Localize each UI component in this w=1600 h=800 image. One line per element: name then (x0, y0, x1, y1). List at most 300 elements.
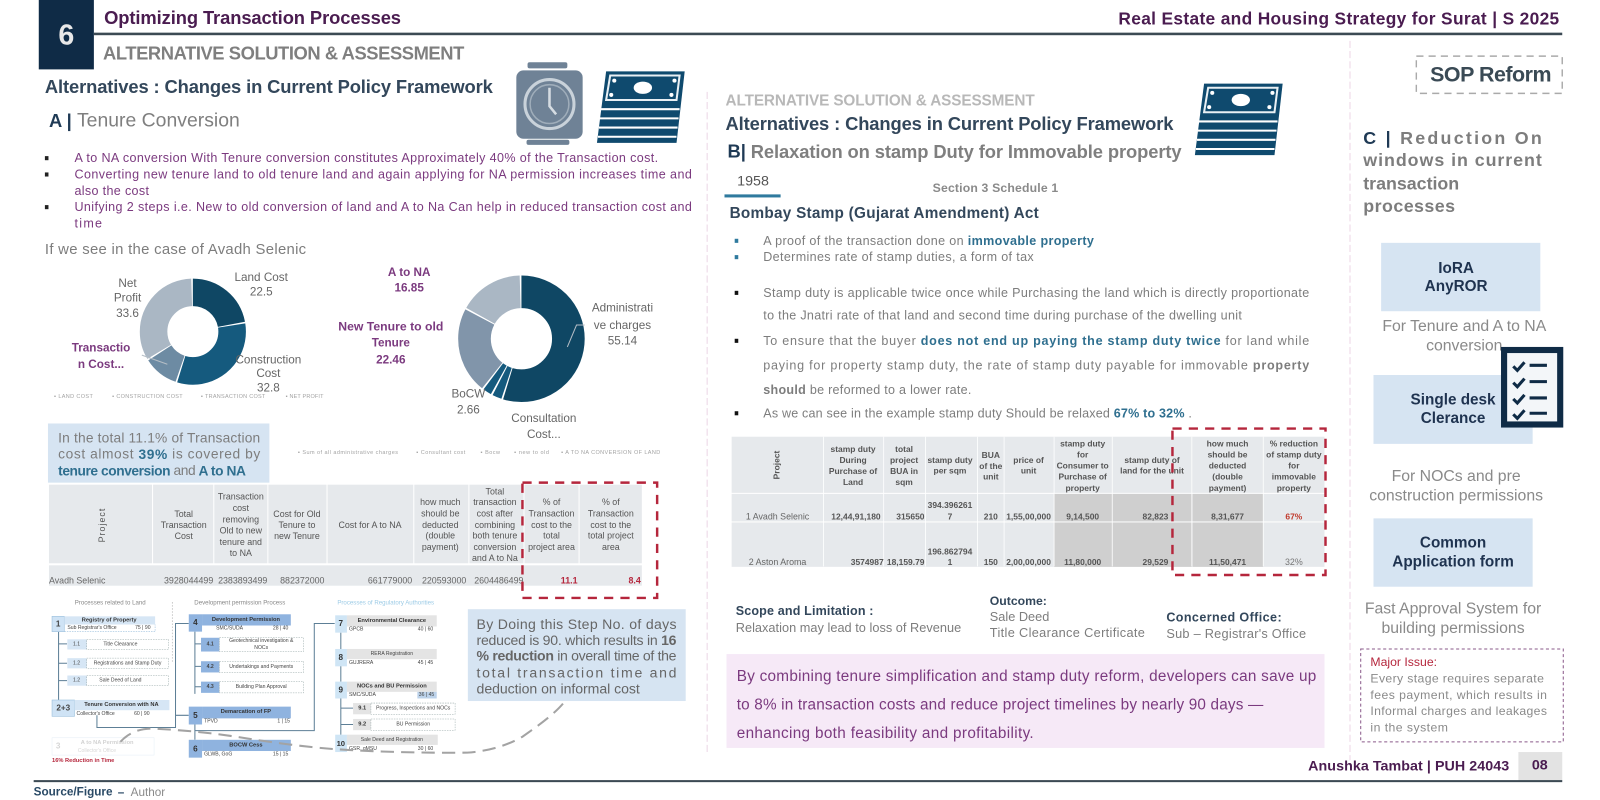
table: transaction cost comparison: Project (97, 508, 107, 542)
step 4.2: Undertakings and Payments (229, 664, 294, 670)
bullets: act purpose (735, 234, 1094, 264)
table: transaction cost comparison: combining (475, 520, 515, 530)
card: iORA: IoRA (1438, 260, 1474, 277)
table: stamp duty comparison: 2,00,00,000 (1006, 557, 1051, 567)
panel C heading: transaction (1363, 174, 1459, 194)
table: transaction cost comparison: tenure and (220, 537, 262, 547)
time reduction note: 16% Reduction in Time (52, 758, 114, 764)
table: transaction cost comparison: 3928044499 (164, 576, 213, 586)
process diagram: Development permission Process (194, 600, 285, 607)
caption: fast approval: Fast Approval System for (1365, 601, 1541, 618)
step 9.1: Progress, Inspections and NOCs (376, 706, 451, 712)
table: transaction cost comparison: 2604486499 (474, 576, 524, 586)
step 4.1: Geotechnical investigation & (229, 638, 294, 644)
donut 1 labels: n Cost... (78, 358, 124, 371)
donut 1 labels: Transactio (72, 341, 130, 354)
table: stamp duty comparison: property (1066, 483, 1100, 493)
card: single desk (1373, 375, 1533, 444)
donut chart: project cost split (154, 292, 232, 371)
table: stamp duty comparison: 1 Avadh Selenic (746, 511, 810, 521)
table: stamp duty comparison: BUA in (890, 466, 918, 476)
donut 1 legend: ▪ TRANSACTION COST (201, 394, 266, 400)
callout: days reduced: deduction on informal cost (477, 680, 640, 696)
bullets: stamp duty argument (735, 286, 1309, 420)
caption: fast approval: building permissions (1381, 620, 1525, 637)
conclusion box: By combining tenure simplification and stamp duty reform, developers can save up (737, 668, 1316, 685)
table: stamp duty comparison: deducted (1209, 461, 1246, 471)
card: common application form: Common (1420, 534, 1486, 551)
table: transaction cost comparison: 2383893499 (218, 576, 267, 586)
panel C heading: processes (1363, 196, 1455, 216)
table: transaction cost comparison: Cost (175, 531, 193, 541)
step 6 (189, 740, 291, 758)
step 9 (335, 682, 437, 698)
concerned office (1166, 610, 1306, 641)
step 1.1: 1.1 (73, 641, 80, 647)
donut 1 legend: ▪ NET PROFIT (286, 394, 324, 400)
bullets: tenure conversion: time (74, 216, 102, 230)
table: transaction cost comparison: Transaction (588, 508, 634, 518)
caption: fast approval (1365, 601, 1541, 637)
table: stamp duty comparison: 8,31,677 (1211, 511, 1244, 521)
panel divider A/B (706, 92, 708, 753)
icon: clock (516, 62, 583, 145)
table: transaction cost comparison: and A to Na (472, 553, 518, 563)
table: stamp duty comparison: of the (979, 461, 1003, 471)
step 4: 28 | 40 (273, 626, 289, 632)
table: stamp duty comparison: Consumer to (1057, 461, 1109, 471)
card: single desk: Clerance (1421, 410, 1485, 427)
step 2+3: 2+3 (56, 704, 71, 713)
table: transaction cost comparison: cost (233, 503, 249, 513)
table: transaction cost comparison: 220593000 (422, 576, 466, 586)
donut 1 labels: 33.6 (116, 307, 139, 320)
caption: tenure conversion: For Tenure and A to NA (1382, 318, 1547, 335)
bullets: stamp duty argument: Stamp duty is applicable twice once while Purchasing the land which is directly proportionate (763, 286, 1309, 300)
caption: NOCs (1369, 468, 1543, 504)
table: transaction cost comparison: payment) (422, 542, 459, 552)
bullets: tenure conversion: Unifying 2 steps i.e. New to old conversion of land and A to Na Can help in reduced transaction cost and (74, 200, 692, 214)
donut 2 labels: BoCW (451, 387, 486, 400)
donut 1 legend (54, 394, 324, 400)
process diagram: Processes of Regulatory Authorities (337, 600, 434, 607)
removed step 3 (52, 738, 154, 755)
major issue note: Informal charges and leakages (1370, 704, 1547, 718)
act name: Bombay Stamp (Gujarat Amendment) Act (730, 205, 1039, 222)
act year: 1958 (737, 174, 769, 190)
step 9: 36 | 45 (419, 692, 434, 698)
step 1.1 (67, 639, 168, 649)
step 1: Sub Registrar's Office (67, 625, 117, 631)
step 1.3: Sale Deed of Land (99, 678, 142, 684)
card: iORA: AnyROR (1425, 278, 1488, 295)
table: stamp duty comparison: of stamp duty (1266, 450, 1322, 460)
highlight box: table 2 (1172, 429, 1326, 575)
donut 1 labels: Profit (114, 291, 142, 304)
connector lines (59, 623, 353, 740)
bullets: tenure conversion: A to NA conversion With Tenure conversion constitutes Approximately 40% of the Transaction cost. (74, 151, 658, 165)
section reference: Section 3 Schedule 1 (933, 181, 1058, 195)
panel C heading: C | Reduction On (1363, 128, 1542, 148)
card: common application form: Application form (1392, 554, 1514, 571)
step 1: Registry of Property (82, 617, 137, 623)
table: transaction cost comparison: total (543, 531, 560, 541)
card: single desk: Single desk (1411, 392, 1496, 409)
step 1.2: Registrations and Stamp Duty (94, 660, 162, 666)
step 7: Environmental Clearance (358, 618, 426, 624)
step 4: SMC/SUDA (216, 626, 244, 632)
table: stamp duty comparison: Purchase of (1058, 472, 1107, 482)
callout: days reduced: % reduction in overall time of the (477, 648, 677, 664)
step 4.2 (201, 661, 304, 672)
table: stamp duty comparison: 18,159.79 (887, 557, 925, 567)
table: stamp duty comparison: 32% (1285, 557, 1303, 567)
table: transaction cost comparison: removing (223, 514, 259, 524)
bullets: stamp duty argument: As we can see in the example stamp duty Should be relaxed 67% to 32% . (763, 406, 1192, 420)
table: transaction cost comparison: cost to the (590, 520, 631, 530)
step 7: 40 | 60 (418, 627, 433, 633)
table: stamp duty comparison: 150 (984, 557, 998, 567)
removed step 3: Collector's Office (78, 748, 116, 754)
card: iORA (1381, 243, 1540, 311)
table: stamp duty comparison: sqm (895, 477, 913, 487)
table: transaction cost comparison: Total (174, 509, 193, 519)
act year (724, 174, 781, 197)
outcome: Title Clearance Certificate (990, 625, 1145, 640)
source note: Source/Figure – Author (34, 785, 165, 798)
table: transaction cost comparison: deducted (422, 520, 459, 530)
table: stamp duty comparison: 315650 (896, 511, 925, 521)
major issue note: in the system (1370, 721, 1448, 735)
scope and limitation: Scope and Limitation : (736, 604, 873, 618)
outcome (990, 594, 1145, 640)
step 2+3 (52, 700, 169, 717)
donut 2 legend: ▪ new to old (514, 450, 549, 456)
author credit: Anushka Tambat | PUH 24043 (1308, 758, 1509, 774)
table: transaction cost comparison: 882372000 (280, 576, 325, 586)
table: transaction cost comparison: cost to the (531, 520, 572, 530)
table: stamp duty comparison (732, 437, 1324, 567)
caption: tenure conversion: conversion (1426, 337, 1502, 354)
scope and limitation: Relaxation may lead to loss of Revenue (736, 620, 961, 635)
panel B heading: Alternatives : Changes in Current Policy Framework (726, 113, 1174, 134)
donut 1 labels (72, 271, 301, 394)
table: stamp duty comparison: 1,55,00,000 (1006, 511, 1051, 521)
icon: checklist (1504, 350, 1560, 424)
panel heading: alternatives: Alternatives : Changes in Current Policy Framework (45, 76, 494, 97)
table: transaction cost comparison: Old to new (220, 526, 263, 536)
step 9: 9 (339, 685, 344, 694)
donut 2 legend: ▪ Sum of all administrative charges (298, 450, 398, 456)
step 2+3: Tenure Conversion with NA (84, 702, 159, 708)
step 4.3 (201, 682, 304, 693)
donut 1 labels: Cost (256, 367, 281, 380)
card: common application form (1373, 518, 1533, 587)
donut 2 labels: 16.85 (395, 281, 424, 294)
step 2+3: Collector's Office (77, 711, 115, 717)
table: stamp duty comparison: total (895, 444, 913, 454)
step 1 (52, 616, 155, 632)
donut 2 labels: Consultation (511, 412, 576, 425)
table: transaction cost comparison: Cost for A to NA (338, 520, 402, 530)
step 5: TPVD (204, 718, 218, 724)
bullets: tenure conversion: also the cost (74, 184, 149, 198)
step 9.1: 9.1 (358, 706, 367, 712)
table: stamp duty comparison: per sqm (934, 466, 966, 476)
step 4.2: 4.2 (207, 664, 214, 670)
table: stamp duty comparison: price of (1013, 455, 1044, 465)
table: stamp duty comparison: 210 (984, 511, 998, 521)
donut 1 labels: 22.5 (250, 285, 273, 298)
table: transaction cost comparison: Transaction (161, 520, 207, 530)
step 1.1: Title Clearance (103, 641, 138, 647)
table: transaction cost comparison: 11.1 (561, 576, 578, 586)
step 6: 6 (193, 744, 198, 753)
table: stamp duty comparison: 7 (948, 511, 953, 521)
removed step 3: A to NA Permission (81, 740, 134, 746)
table: transaction cost comparison: % of (543, 497, 561, 507)
table: stamp duty comparison: Project (772, 450, 782, 479)
table: stamp duty comparison: stamp duty (831, 444, 876, 454)
step 9.1 (353, 703, 455, 714)
table: stamp duty comparison: project (890, 455, 918, 465)
table: stamp duty comparison: unit (983, 472, 999, 482)
table: stamp duty comparison: 11,80,000 (1064, 557, 1102, 567)
bullets: act purpose: A proof of the transaction done on immovable property (763, 234, 1094, 248)
donut 2 labels: Cost... (527, 428, 561, 441)
step 4.3: 4.3 (207, 684, 214, 690)
step 5: 5 (193, 711, 198, 720)
callout: tenure share of transaction cost: cost almost 39% is covered by (58, 447, 260, 462)
donut 2 labels: A to NA (388, 266, 431, 279)
SOP reform tag (1416, 56, 1562, 93)
panel divider B/C (1349, 41, 1351, 760)
icon: money stack (597, 71, 685, 143)
concerned office: Sub – Registrar's Office (1166, 626, 1306, 641)
table: transaction cost comparison: new Tenure (274, 531, 320, 541)
table: stamp duty comparison: 1 (948, 557, 953, 567)
donut 2 labels: ve charges (594, 319, 651, 332)
step 10: Sale Deed and Registration (361, 737, 423, 743)
table: stamp duty comparison: BUA (982, 450, 1000, 460)
page number: 08 (1532, 757, 1548, 773)
step 10: GSR, gMSU (349, 746, 377, 752)
table: stamp duty comparison: 3574987 (851, 557, 884, 567)
removed step 3: 3 (56, 741, 61, 750)
donut 2 labels: New Tenure to old (338, 320, 443, 334)
step 1.2 (67, 658, 168, 668)
SOP reform tag: SOP Reform (1430, 62, 1552, 86)
bullets: stamp duty argument: To ensure that the buyer does not end up paying the stamp duty twice for land while (763, 334, 1309, 348)
step 1: 1 (56, 619, 61, 628)
table: stamp duty comparison: 82,823 (1143, 511, 1169, 521)
table: transaction cost comparison: total project (588, 531, 634, 541)
table: stamp duty comparison: 29,529 (1143, 557, 1169, 567)
caption: NOCs: construction permissions (1369, 487, 1543, 504)
donut 2 legend (298, 450, 660, 456)
outcome: Outcome: (990, 594, 1047, 608)
donut 2 legend: ▪ Consultant cost (416, 450, 466, 456)
step 5 (189, 707, 291, 724)
step 1.2: 1.2 (73, 660, 80, 666)
table: stamp duty comparison: stamp duty (1060, 438, 1105, 448)
report title: Real Estate and Housing Strategy for Surat | S 2025 (1118, 8, 1560, 28)
donut 2 labels (338, 266, 653, 441)
table: transaction cost comparison: 8.4 (628, 576, 641, 586)
table: stamp duty comparison: payment) (1209, 483, 1247, 493)
step 9.2: BU Permission (396, 721, 430, 727)
table: transaction cost comparison: how much (420, 497, 461, 507)
table: transaction cost comparison (49, 485, 642, 586)
donut 1 labels: 32.8 (257, 381, 280, 394)
callout: days reduced: total transaction time and (477, 664, 677, 680)
step 1.3 (67, 676, 168, 686)
table: transaction cost comparison: conversion (473, 542, 516, 552)
major issue note: Major Issue: (1370, 655, 1437, 669)
bullets: stamp duty argument: should be reformed to a lower rate. (763, 383, 971, 397)
table: stamp duty comparison: stamp duty of (1124, 455, 1180, 465)
donut 2 legend: ▪ A TO NA CONVERSION OF LAND (561, 450, 660, 456)
table: transaction cost comparison: area (602, 542, 620, 552)
bullets: tenure conversion (45, 151, 692, 230)
step 8: 8 (339, 653, 344, 662)
step 4 (189, 614, 291, 632)
table: stamp duty comparison: 394.396261 (928, 500, 973, 510)
table: stamp duty comparison: Land (843, 477, 863, 487)
table: transaction cost comparison: % of (602, 497, 620, 507)
table: transaction cost comparison: 661779000 (368, 576, 412, 586)
page number (1518, 752, 1562, 781)
table: stamp duty comparison: 11,50,471 (1209, 557, 1246, 567)
step 10: 10 (337, 739, 345, 748)
callout: days reduced: By Doing this Step No. of days (477, 616, 677, 632)
table: transaction cost comparison: Tenure to (278, 520, 315, 530)
callout: days reduced: reduced is 90. which results in 16 (477, 632, 677, 648)
table: transaction cost comparison: (double (426, 531, 455, 541)
callout: tenure share of transaction cost (48, 423, 269, 483)
step 6: 15 | 15 (273, 752, 289, 758)
step 10: 30 | 60 (418, 746, 433, 752)
table: stamp duty comparison: should be (1208, 450, 1248, 460)
table: stamp duty comparison: stamp duty (927, 455, 973, 465)
case study intro: If we see in the case of Avadh Selenic (45, 242, 307, 258)
table: transaction cost comparison: to NA (230, 548, 252, 558)
donut 1 legend: ▪ LAND COST (54, 394, 93, 400)
callout: days reduced (468, 609, 686, 701)
panel B label: ALTERNATIVE SOLUTION & ASSESSMENT (726, 93, 1035, 110)
step 7: 7 (339, 619, 344, 628)
step 1.3: 1.2 (73, 678, 80, 684)
section number badge (39, 0, 94, 69)
step 4.3: Building Plan Approval (236, 684, 287, 690)
donut 2 labels: 22.46 (376, 354, 406, 367)
concerned office: Concerned Office: (1166, 610, 1282, 624)
donut chart: transaction cost split (474, 292, 568, 386)
table: transaction cost comparison: cost after (477, 508, 513, 518)
table: stamp duty comparison: (double (1212, 472, 1243, 482)
dashed callout connector (120, 702, 564, 753)
highlight box: table 1 (522, 483, 657, 598)
icon: money stack (1195, 84, 1283, 155)
caption: NOCs: For NOCs and pre (1392, 468, 1521, 485)
step 4: Development Permission (212, 617, 280, 623)
panel C heading: windows in current (1362, 150, 1542, 170)
step 6: BOCW Cess (229, 742, 263, 748)
table: stamp duty comparison: 12,44,91,180 (831, 511, 881, 521)
step 5: Demarcation of FP (221, 709, 271, 715)
bullets: stamp duty argument: to the Jnatri rate of that land and second time during purchase of the dwelling unit (763, 308, 1242, 322)
step 8 (335, 649, 437, 666)
table: stamp duty comparison: 67% (1285, 511, 1303, 521)
step 2+3: 60 | 90 (134, 711, 150, 717)
table: stamp duty comparison: 196.862794 (928, 547, 973, 557)
process diagram (52, 600, 455, 764)
table: stamp duty comparison: During (839, 455, 867, 465)
donut 2 labels: Tenure (372, 336, 410, 349)
donut 1 labels: Construction (235, 354, 301, 367)
table: transaction cost comparison: Transaction (529, 508, 575, 518)
table: transaction cost comparison: project area (528, 542, 575, 552)
step 4: 4 (193, 618, 198, 627)
major issue note: fees payment, which results in (1370, 688, 1547, 702)
callout: tenure share of transaction cost: tenure conversion and A to NA (58, 463, 246, 478)
major issue note: Every stage requires separate (1370, 672, 1544, 686)
bullets: tenure conversion: Converting new tenure land to old tenure land and again applying for NA permission increases time and (74, 167, 692, 181)
step 5: 1 | 15 (277, 718, 290, 724)
table: stamp duty comparison: property (1277, 483, 1311, 493)
major issue note (1361, 649, 1563, 742)
subheading: tenure conversion: A | Tenure Conversion (49, 109, 240, 131)
step 7 (335, 615, 437, 633)
step 10 (335, 735, 438, 752)
conclusion box: to 8% in transaction costs and reduce project timelines by nearly 90 days — (737, 697, 1264, 714)
donut 2 legend: ▪ Bocw (481, 450, 500, 456)
step 8: RERA Registration (371, 651, 413, 657)
table: stamp duty comparison: for (1077, 450, 1089, 460)
bullets: stamp duty argument: paying for property stamp duty, the rate of stamp duty payable for immovable property (763, 358, 1309, 372)
section heading: ALTERNATIVE SOLUTION & ASSESSMENT (103, 43, 465, 64)
conclusion box (727, 654, 1324, 748)
table: stamp duty comparison: unit (1021, 466, 1036, 476)
table: transaction cost comparison: transaction (473, 497, 517, 507)
step 4.1: NOCs (254, 645, 269, 651)
section number badge: 6 (58, 20, 74, 52)
callout: tenure share of transaction cost: In the total 11.1% of Transaction (58, 430, 260, 445)
step 9: SMC/SUDA (349, 692, 376, 698)
conclusion box: enhancing both feasibility and profitability. (737, 725, 1034, 742)
table: stamp duty comparison: Purchase of (829, 466, 877, 476)
step 9: NOCs and BU Permission (357, 684, 427, 690)
table: stamp duty comparison: % reduction (1270, 438, 1318, 448)
donut 2 labels: 55.14 (608, 334, 638, 347)
step 9.2 (353, 719, 455, 730)
donut 2 labels: 2.66 (457, 404, 480, 417)
table: stamp duty comparison: for (1288, 461, 1300, 471)
step 4.1: 4.1 (207, 641, 214, 647)
panel C heading (1362, 128, 1542, 216)
table: transaction cost comparison: both tenure (472, 531, 517, 541)
bullets: act purpose: Determines rate of stamp duties, a form of tax (763, 250, 1034, 264)
slide title: Optimizing Transaction Processes (104, 7, 401, 28)
donut 1 labels: Net (118, 277, 137, 290)
table: transaction cost comparison: Cost for Old (273, 509, 321, 519)
table: stamp duty comparison: how much (1207, 438, 1248, 448)
table: transaction cost comparison: Avadh Selenic (49, 576, 106, 586)
table: transaction cost comparison: Total (486, 486, 504, 496)
table: stamp duty comparison: immovable (1272, 472, 1316, 482)
step 8: 45 | 45 (418, 660, 433, 666)
table: transaction cost comparison: Transaction (218, 492, 264, 502)
